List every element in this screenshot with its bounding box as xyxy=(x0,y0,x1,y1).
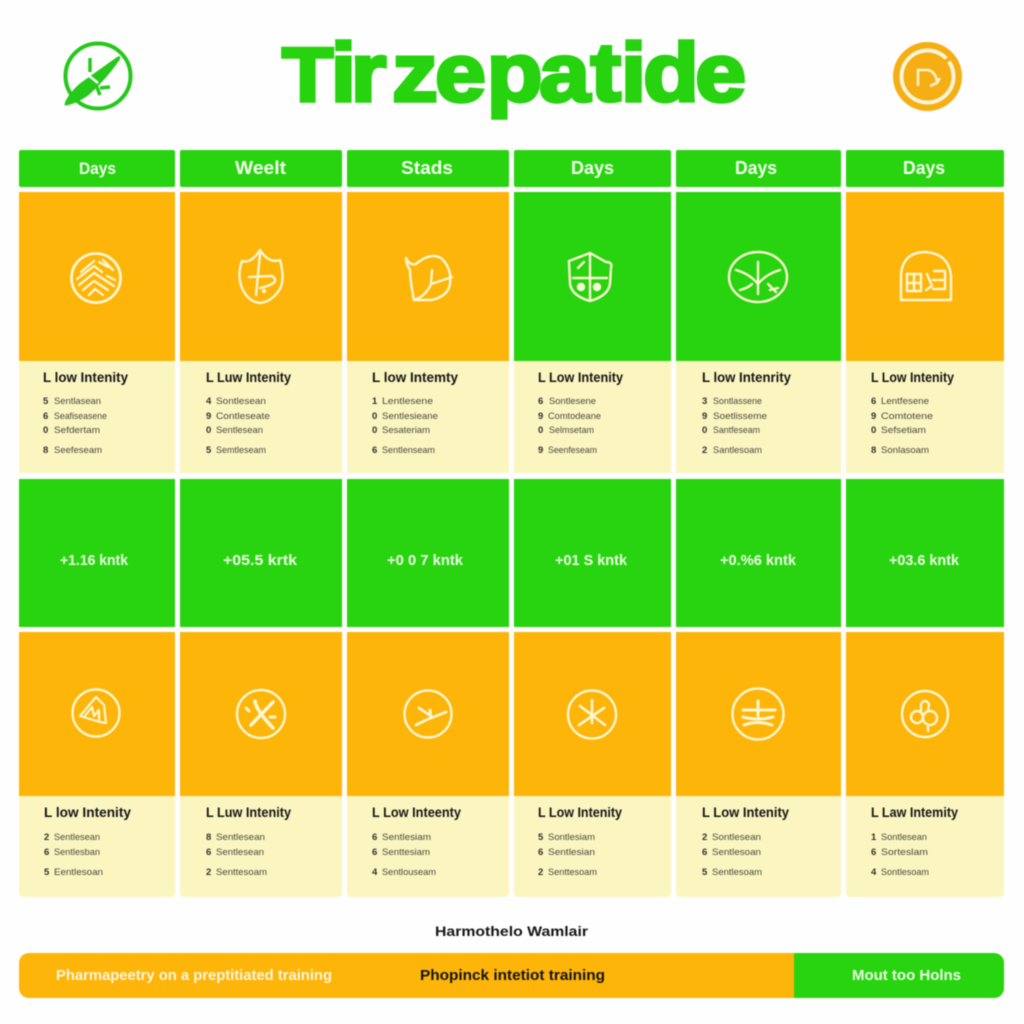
text: low intensity list: 5 xyxy=(43,396,49,407)
text: low intensity list: Santfeseam xyxy=(713,425,760,436)
text: low intensity list: 4 xyxy=(372,867,378,878)
text: low intensity list: Comtodeane xyxy=(548,411,601,422)
green value row xyxy=(19,479,1004,627)
text: low intensity list: 8 xyxy=(206,832,211,843)
text: low intensity list: 2 xyxy=(538,867,543,878)
icon: arched window xyxy=(901,252,951,300)
text: low intensity list: 5 xyxy=(538,832,544,843)
text: low intensity list: Senttesiam xyxy=(382,847,430,858)
header: Days 1 xyxy=(19,150,175,187)
text: low intensity list: 2 xyxy=(702,832,707,843)
text: low intensity list xyxy=(871,805,958,878)
text: low intensity list: Sontlesene xyxy=(549,396,596,407)
text: low intensity list: 6 xyxy=(538,396,543,407)
text: low intensity list xyxy=(43,370,128,456)
footer label: left: Pharmapeetry on a preptitiated training xyxy=(56,967,332,984)
text: low intensity list: Sorteslam xyxy=(881,847,928,858)
text: low intensity list: Seafiseasene xyxy=(54,411,107,422)
text: low intensity list: L Low Intenity xyxy=(702,805,789,820)
icon: circled asterisk xyxy=(568,690,616,738)
text: low intensity list: Sentlesban xyxy=(54,847,100,858)
header: Days 6 xyxy=(846,150,1004,187)
text: low intensity list: Sontlesean xyxy=(881,832,927,843)
text: low intensity list: Sesateriam xyxy=(382,425,430,436)
text: low intensity list: Sentlesean xyxy=(216,847,264,858)
value tile 1: +1.16 kntk xyxy=(60,553,129,569)
text: low intensity list: 5 xyxy=(702,867,708,878)
icon: shield xyxy=(239,250,283,303)
title: irzepatide xyxy=(331,27,746,119)
text: low intensity list: Sontlesiam xyxy=(548,832,595,843)
text: low intensity list: 2 xyxy=(44,832,49,843)
text: low intensity list: 2 xyxy=(206,867,211,878)
value tile 2: +05.5 krtk xyxy=(223,553,298,569)
value tile 3 xyxy=(347,479,509,627)
header: Days 5 xyxy=(676,150,841,187)
text: low intensity list: Sontlesean xyxy=(216,396,266,407)
panel: row 1 column 3 xyxy=(347,192,509,473)
text: low intensity list: Semtleseam xyxy=(216,445,266,456)
panel: row 1 column 6 xyxy=(846,192,1004,473)
header: Days 1: Days xyxy=(79,159,116,178)
text: low intensity list: 8 xyxy=(871,445,876,456)
footer bar xyxy=(19,953,1004,998)
text: low intensity list: Santlesoam xyxy=(713,445,762,456)
icon: circled horizontal lines xyxy=(732,688,784,740)
header: Weelt xyxy=(180,150,342,187)
text: low intensity list: 0 xyxy=(538,425,543,436)
text: low intensity list: 0 xyxy=(702,425,707,436)
text: low intensity list: Senttesoam xyxy=(216,867,267,878)
text: low intensity list: Sontlesoam xyxy=(881,867,929,878)
text: low intensity list xyxy=(702,370,791,456)
text: low intensity list: L Luw Intenity xyxy=(206,805,291,820)
text: low intensity list: 5 xyxy=(206,445,212,456)
text: low intensity list: 0 xyxy=(372,411,377,422)
text: low intensity list: 6 xyxy=(538,847,543,858)
text: low intensity list: 1 xyxy=(871,832,877,843)
value tile 6: +03.6 kntk xyxy=(889,553,960,569)
text: low intensity list: 4 xyxy=(206,396,212,407)
icon: green crossed-out plane xyxy=(65,44,130,108)
text: low intensity list: Sentlesoan xyxy=(712,847,761,858)
text: low intensity list: Sentlasean xyxy=(54,396,101,407)
header: Days 4 xyxy=(514,150,671,187)
header: Weelt: Weelt xyxy=(235,158,286,178)
panel: row 1 column 4 xyxy=(514,192,671,473)
value tile 4 xyxy=(514,479,671,627)
text: low intensity list: 9 xyxy=(702,411,707,422)
panel: row 3 column 4 xyxy=(514,632,671,897)
text: low intensity list xyxy=(206,370,291,456)
value tile 2 xyxy=(180,479,342,627)
header: Days 4: Days xyxy=(571,158,614,178)
text: low intensity list: Selmsetam xyxy=(549,425,594,436)
text: low intensity list: 6 xyxy=(372,847,377,858)
text: low intensity list: 9 xyxy=(538,411,543,422)
text: low intensity list: 0 xyxy=(871,425,876,436)
header: Stads: Stads xyxy=(401,158,453,178)
text: low intensity list xyxy=(538,370,623,456)
text: low intensity list: Sentlesian xyxy=(548,847,595,858)
text: low intensity list: 9 xyxy=(871,411,876,422)
text: low intensity list xyxy=(702,805,789,878)
text: low intensity list: 2 xyxy=(702,445,707,456)
text: low intensity list: L Low Intenity xyxy=(871,370,954,385)
text: low intensity list: Sefsetiam xyxy=(881,425,926,436)
icon: orange circular badge xyxy=(893,42,962,111)
panel: row 3 column 5 xyxy=(676,632,841,897)
header: Stads xyxy=(347,150,509,187)
text: low intensity list: 1 xyxy=(372,396,378,407)
text: low intensity list: L Low Intenity xyxy=(538,370,623,385)
icon: circled tent xyxy=(72,690,120,736)
text: low intensity list: Sentlenseam xyxy=(382,445,435,456)
text: low intensity list xyxy=(871,370,954,456)
column headers xyxy=(19,150,1004,187)
title: T xyxy=(282,33,333,117)
text: low intensity list: Sentlesoam xyxy=(712,867,762,878)
panel: row 1 column 5 xyxy=(676,192,841,473)
icon: oval with sprout xyxy=(729,252,787,302)
text: low intensity list: L Law Intemity xyxy=(871,805,958,820)
icon: circled plane xyxy=(404,690,452,738)
icon: striped circle xyxy=(72,254,120,302)
text: low intensity list: L low Intemty xyxy=(372,370,458,385)
text: low intensity list: Lentlesene xyxy=(382,396,433,407)
panel: row 3 column 3 xyxy=(347,632,509,897)
text: low intensity list: 6 xyxy=(372,445,377,456)
value tile 4: +01 S kntk xyxy=(555,553,628,569)
text: low intensity list: Senttesoam xyxy=(548,867,597,878)
text: low intensity list: Sonlasoam xyxy=(881,445,929,456)
text: low intensity list: 3 xyxy=(702,396,707,407)
text: low intensity list: 0 xyxy=(372,425,377,436)
text: low intensity list: Comtotene xyxy=(881,411,933,422)
value tile 5 xyxy=(676,479,841,627)
text: low intensity list: 6 xyxy=(206,847,211,858)
text: low intensity list: Sentlouseam xyxy=(382,867,436,878)
icon: quartered shield xyxy=(569,253,611,301)
value tile 6 xyxy=(846,479,1004,627)
header: Days 6: Days xyxy=(903,158,945,178)
icon: circled molecule xyxy=(902,691,948,737)
text: low intensity list: 6 xyxy=(43,411,48,422)
text: low intensity list: 9 xyxy=(206,411,211,422)
text: low intensity list: Eentlesoan xyxy=(54,867,103,878)
text: low intensity list: Sontlassene xyxy=(713,396,762,407)
text: low intensity list: Seenfeseam xyxy=(548,445,597,456)
text: low intensity list: Sentlesieane xyxy=(382,411,438,422)
text: low intensity list: Contleseate xyxy=(216,411,270,422)
footer caption: Harmothelo Wamlair xyxy=(435,923,589,939)
footer label: middle: Phopinck intetiot training xyxy=(420,967,605,984)
text: low intensity list: L Low Intenity xyxy=(538,805,622,820)
panel: row 3 column 1 xyxy=(19,632,175,897)
text: low intensity list: 6 xyxy=(871,847,876,858)
value tile 1 xyxy=(19,479,175,627)
text: low intensity list: Sontlesean xyxy=(712,832,761,843)
text: low intensity list: 6 xyxy=(702,847,707,858)
text: low intensity list: 8 xyxy=(43,445,48,456)
text: low intensity list: 0 xyxy=(43,425,48,436)
text: low intensity list: L low Intenrity xyxy=(702,370,791,385)
panel: row 3 column 2 xyxy=(180,632,342,897)
text: low intensity list: L low Intenity xyxy=(44,805,131,820)
icon: circled crossed tools xyxy=(237,690,285,738)
text: low intensity list: L Luw Intenity xyxy=(206,370,291,385)
text: low intensity list xyxy=(538,805,622,878)
text: low intensity list: 6 xyxy=(44,847,49,858)
text: low intensity list xyxy=(372,370,458,456)
value tile 5: +0.%6 kntk xyxy=(720,553,797,569)
value tile 3: +0 0 7 kntk xyxy=(387,553,464,569)
text: low intensity list: Sentlesiam xyxy=(382,832,431,843)
text: low intensity list: L Low Inteenty xyxy=(372,805,461,820)
text: low intensity list: 9 xyxy=(538,445,543,456)
panel: row 3 column 6 xyxy=(846,632,1004,897)
icon: leaf head xyxy=(406,256,452,300)
text: low intensity list xyxy=(372,805,461,878)
text: low intensity list: Sentlesean xyxy=(216,832,265,843)
text: low intensity list: L low Intenity xyxy=(43,370,128,385)
text: low intensity list: Sentlesean xyxy=(54,832,100,843)
panel: row 1 column 1 xyxy=(19,192,175,473)
text: low intensity list xyxy=(44,805,131,878)
text: low intensity list xyxy=(206,805,291,878)
header: Days 5: Days xyxy=(735,158,777,178)
text: low intensity list: Soetlisseme xyxy=(713,411,767,422)
text: low intensity list: Sentlesean xyxy=(216,425,263,436)
text: low intensity list: Sefdertam xyxy=(54,425,100,436)
text: low intensity list: 0 xyxy=(206,425,211,436)
panel: row 1 column 2 xyxy=(180,192,342,473)
text: low intensity list: Lentfesene xyxy=(881,396,929,407)
text: low intensity list: 5 xyxy=(44,867,50,878)
footer label: right: Mout too Holns xyxy=(852,967,961,984)
text: low intensity list: 6 xyxy=(372,832,377,843)
text: low intensity list: Seefeseam xyxy=(54,445,102,456)
text: low intensity list: 4 xyxy=(871,867,877,878)
text: low intensity list: 6 xyxy=(871,396,876,407)
